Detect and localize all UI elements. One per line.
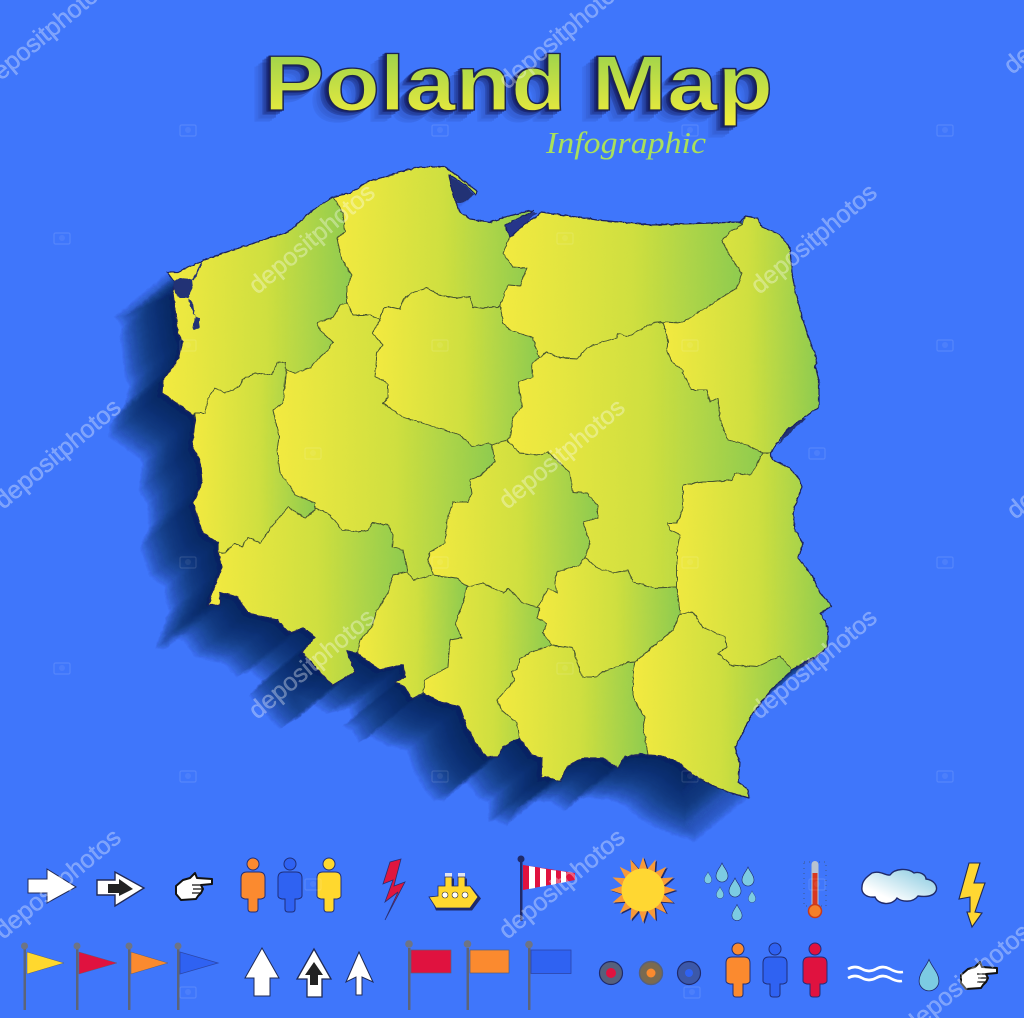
icon: black-in-white arrow up [297,949,331,997]
title: Poland Map [264,39,773,127]
region: Malopolskie [497,645,648,782]
watermarks: depositphotos [493,393,630,515]
watermarks: depositphotos [745,603,882,725]
icon: water waves [848,967,903,981]
region: Podlaskie [663,216,819,453]
Gulf of Gdansk shadow [449,176,474,203]
region: Opolskie [357,572,467,699]
long shadow [108,167,832,842]
icon: orange flag [464,940,509,1010]
region: Warminsko-Mazurskie [500,212,742,359]
icon: red pennant [74,942,117,1010]
national border outline [162,167,832,798]
icon: large water drop [919,960,939,991]
watermarks: depositphotos [745,178,882,300]
map of Poland with long shadow [108,167,832,842]
icon: ship [429,873,481,910]
region: Kujawsko-Pomorskie [372,288,539,447]
icon: red flag [405,940,451,1010]
icon: pointing hand second row [961,962,997,989]
icon: blue flag [525,941,571,1010]
icon: black-in-white arrow right [97,872,144,906]
region: Lubelskie [667,453,832,670]
icon: blue pennant [174,942,218,1010]
icon: rain drops [704,863,756,921]
icon: yellow person [317,858,341,912]
region: Podkarpackie [633,612,792,798]
region: Lubuskie [192,362,315,553]
region: Zachodniopomorskie [162,197,352,415]
icon: red lightning [383,859,405,920]
region: Dolnoslaskie [208,507,407,685]
icon: white arrow up [245,948,279,996]
icon: white arrow right [28,869,76,903]
icon: pointing hand [176,873,212,900]
icon: thermometer [804,861,826,918]
region: Lodzkie [428,440,598,607]
region: Slaskie [423,583,552,757]
east border shadow slivers [778,418,806,445]
watermarks: depositphotos [243,603,380,725]
icon: windsock [518,856,575,921]
region: Wielkopolskie [273,303,495,580]
icon: orange pennant [126,942,168,1010]
icon: blue target [678,962,700,984]
subtitle: Infographic [545,125,706,160]
region: Pomorskie [333,167,533,320]
icon: blue person second row [763,943,787,997]
icon: sun [610,857,678,924]
icon: cloud [862,869,937,904]
voivodeship regions [162,167,832,798]
icon: red person [803,943,827,997]
Szczecin lagoon [173,262,202,330]
icon: blue person [278,858,302,912]
watermarks: depositphotos [243,178,380,300]
icon: yellow lightning [959,863,985,927]
icon: orange target [640,962,662,984]
icon: red target [600,962,622,984]
watermarks: depositphotos [493,823,630,945]
icon: orange person [241,858,265,912]
region: Mazowieckie [507,322,763,588]
Vistula lagoon shadow [505,212,537,236]
south-east border shadow sliver [796,655,818,669]
icon: orange person second row [726,943,750,997]
region: Swietokrzyskie [537,557,680,677]
icon: yellow pennant [21,942,64,1010]
icon: slim arrow up [346,952,373,995]
